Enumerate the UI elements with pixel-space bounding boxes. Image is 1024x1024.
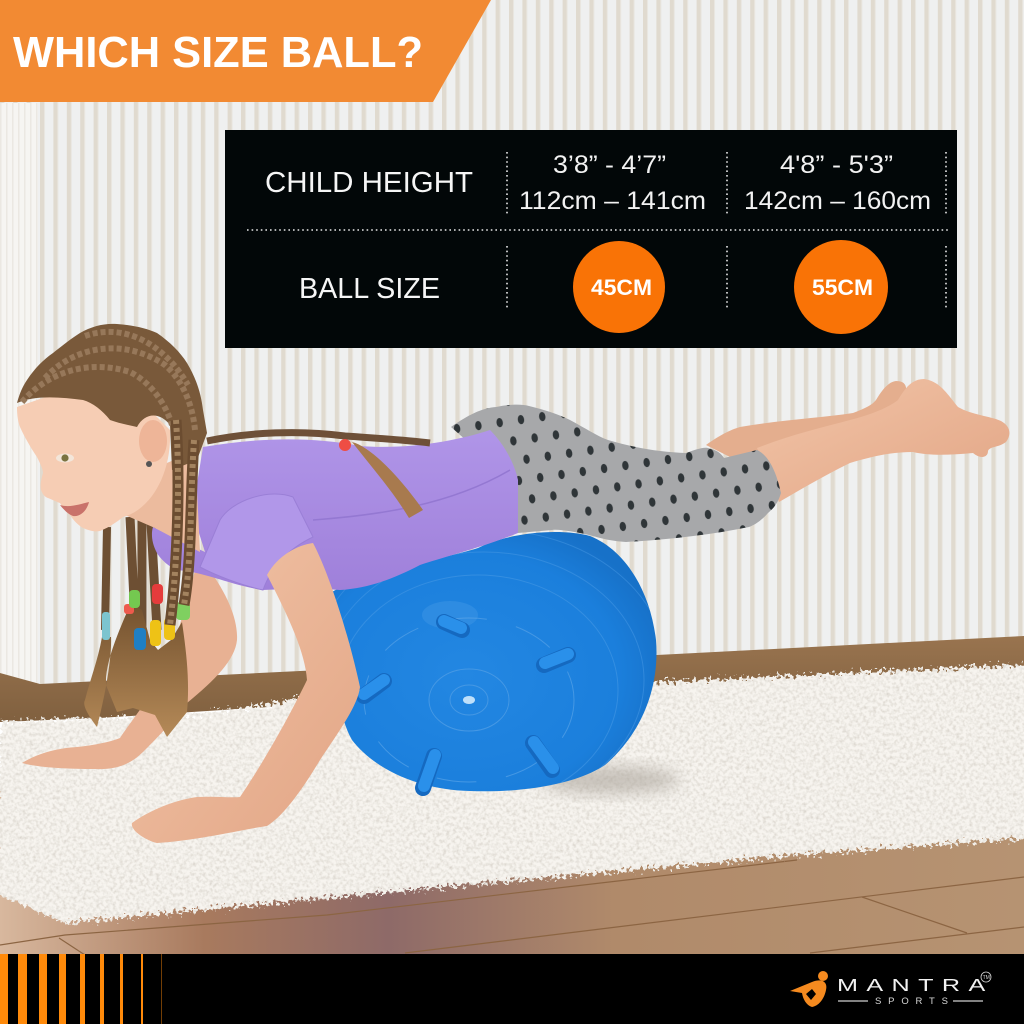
neck bbox=[125, 450, 200, 552]
braid tails bbox=[84, 606, 188, 737]
logo wordmark: MANTRA bbox=[837, 975, 994, 995]
cornrow highlights bbox=[22, 332, 195, 430]
rug shadow under ball bbox=[540, 766, 680, 794]
sleeve seam bbox=[200, 494, 313, 590]
ball rings bbox=[336, 534, 650, 784]
row label: child height: CHILD HEIGHT bbox=[265, 167, 473, 199]
eye bbox=[56, 454, 74, 462]
height range 2 bbox=[744, 151, 931, 215]
badge: 55cm: 55CM bbox=[812, 275, 873, 300]
ear bbox=[139, 420, 167, 462]
girl: polka-dot leggings bbox=[451, 405, 781, 542]
height range 2: 142cm – 160cm bbox=[744, 187, 931, 215]
mouth bbox=[60, 502, 89, 516]
orange stripes bbox=[0, 954, 162, 1024]
dotted dividers bbox=[247, 152, 948, 310]
background: striped wall bbox=[0, 0, 1024, 700]
logo icon bbox=[790, 971, 828, 1007]
band bbox=[339, 439, 351, 451]
badge: 45cm: 45CM bbox=[591, 275, 652, 300]
girl: back-of-hair braids bbox=[84, 517, 190, 737]
height range 1: 112cm – 141cm bbox=[519, 187, 706, 215]
trademark bbox=[981, 972, 991, 982]
header banner bbox=[0, 0, 491, 102]
hair bands bbox=[102, 584, 190, 650]
ball nubs bbox=[364, 621, 568, 788]
height range 1 bbox=[519, 151, 706, 215]
height range 1: 3’8” - 4’7” bbox=[553, 151, 666, 179]
girl: leg in front bbox=[757, 379, 1009, 502]
girl: long braid along back bbox=[207, 433, 430, 518]
background: left wall panel bbox=[0, 103, 38, 693]
logo: Mantra Sports bbox=[790, 971, 994, 1007]
girl: front arm bbox=[132, 543, 360, 843]
shirt fold bbox=[313, 470, 510, 520]
baseboard bbox=[0, 636, 1024, 722]
logo subline: SPORTS bbox=[875, 996, 948, 1007]
trademark: TM bbox=[983, 975, 990, 981]
ball valve bbox=[463, 696, 475, 704]
girl: leg behind bbox=[706, 381, 906, 462]
girl: back arm bbox=[22, 560, 237, 769]
girl: front braids bbox=[170, 420, 194, 625]
ball highlight bbox=[422, 601, 478, 629]
girl: head bbox=[17, 324, 207, 552]
hair cap with braids bbox=[17, 324, 207, 470]
background: wood floor bbox=[0, 780, 1024, 956]
rug bbox=[0, 664, 1024, 923]
footer bar bbox=[0, 954, 1024, 1024]
face bbox=[17, 390, 170, 531]
row label: ball size: BALL SIZE bbox=[299, 273, 440, 305]
badge: 45cm bbox=[573, 241, 665, 333]
girl: purple shirt bbox=[152, 430, 518, 590]
badge: 55cm bbox=[794, 240, 888, 334]
height range 2: 4'8” - 5'3” bbox=[780, 151, 893, 179]
earring bbox=[146, 461, 152, 467]
braid tail bbox=[352, 442, 423, 518]
size table panel bbox=[225, 130, 957, 348]
title: WHICH SIZE BALL? bbox=[13, 28, 423, 77]
exercise ball bbox=[333, 532, 656, 796]
